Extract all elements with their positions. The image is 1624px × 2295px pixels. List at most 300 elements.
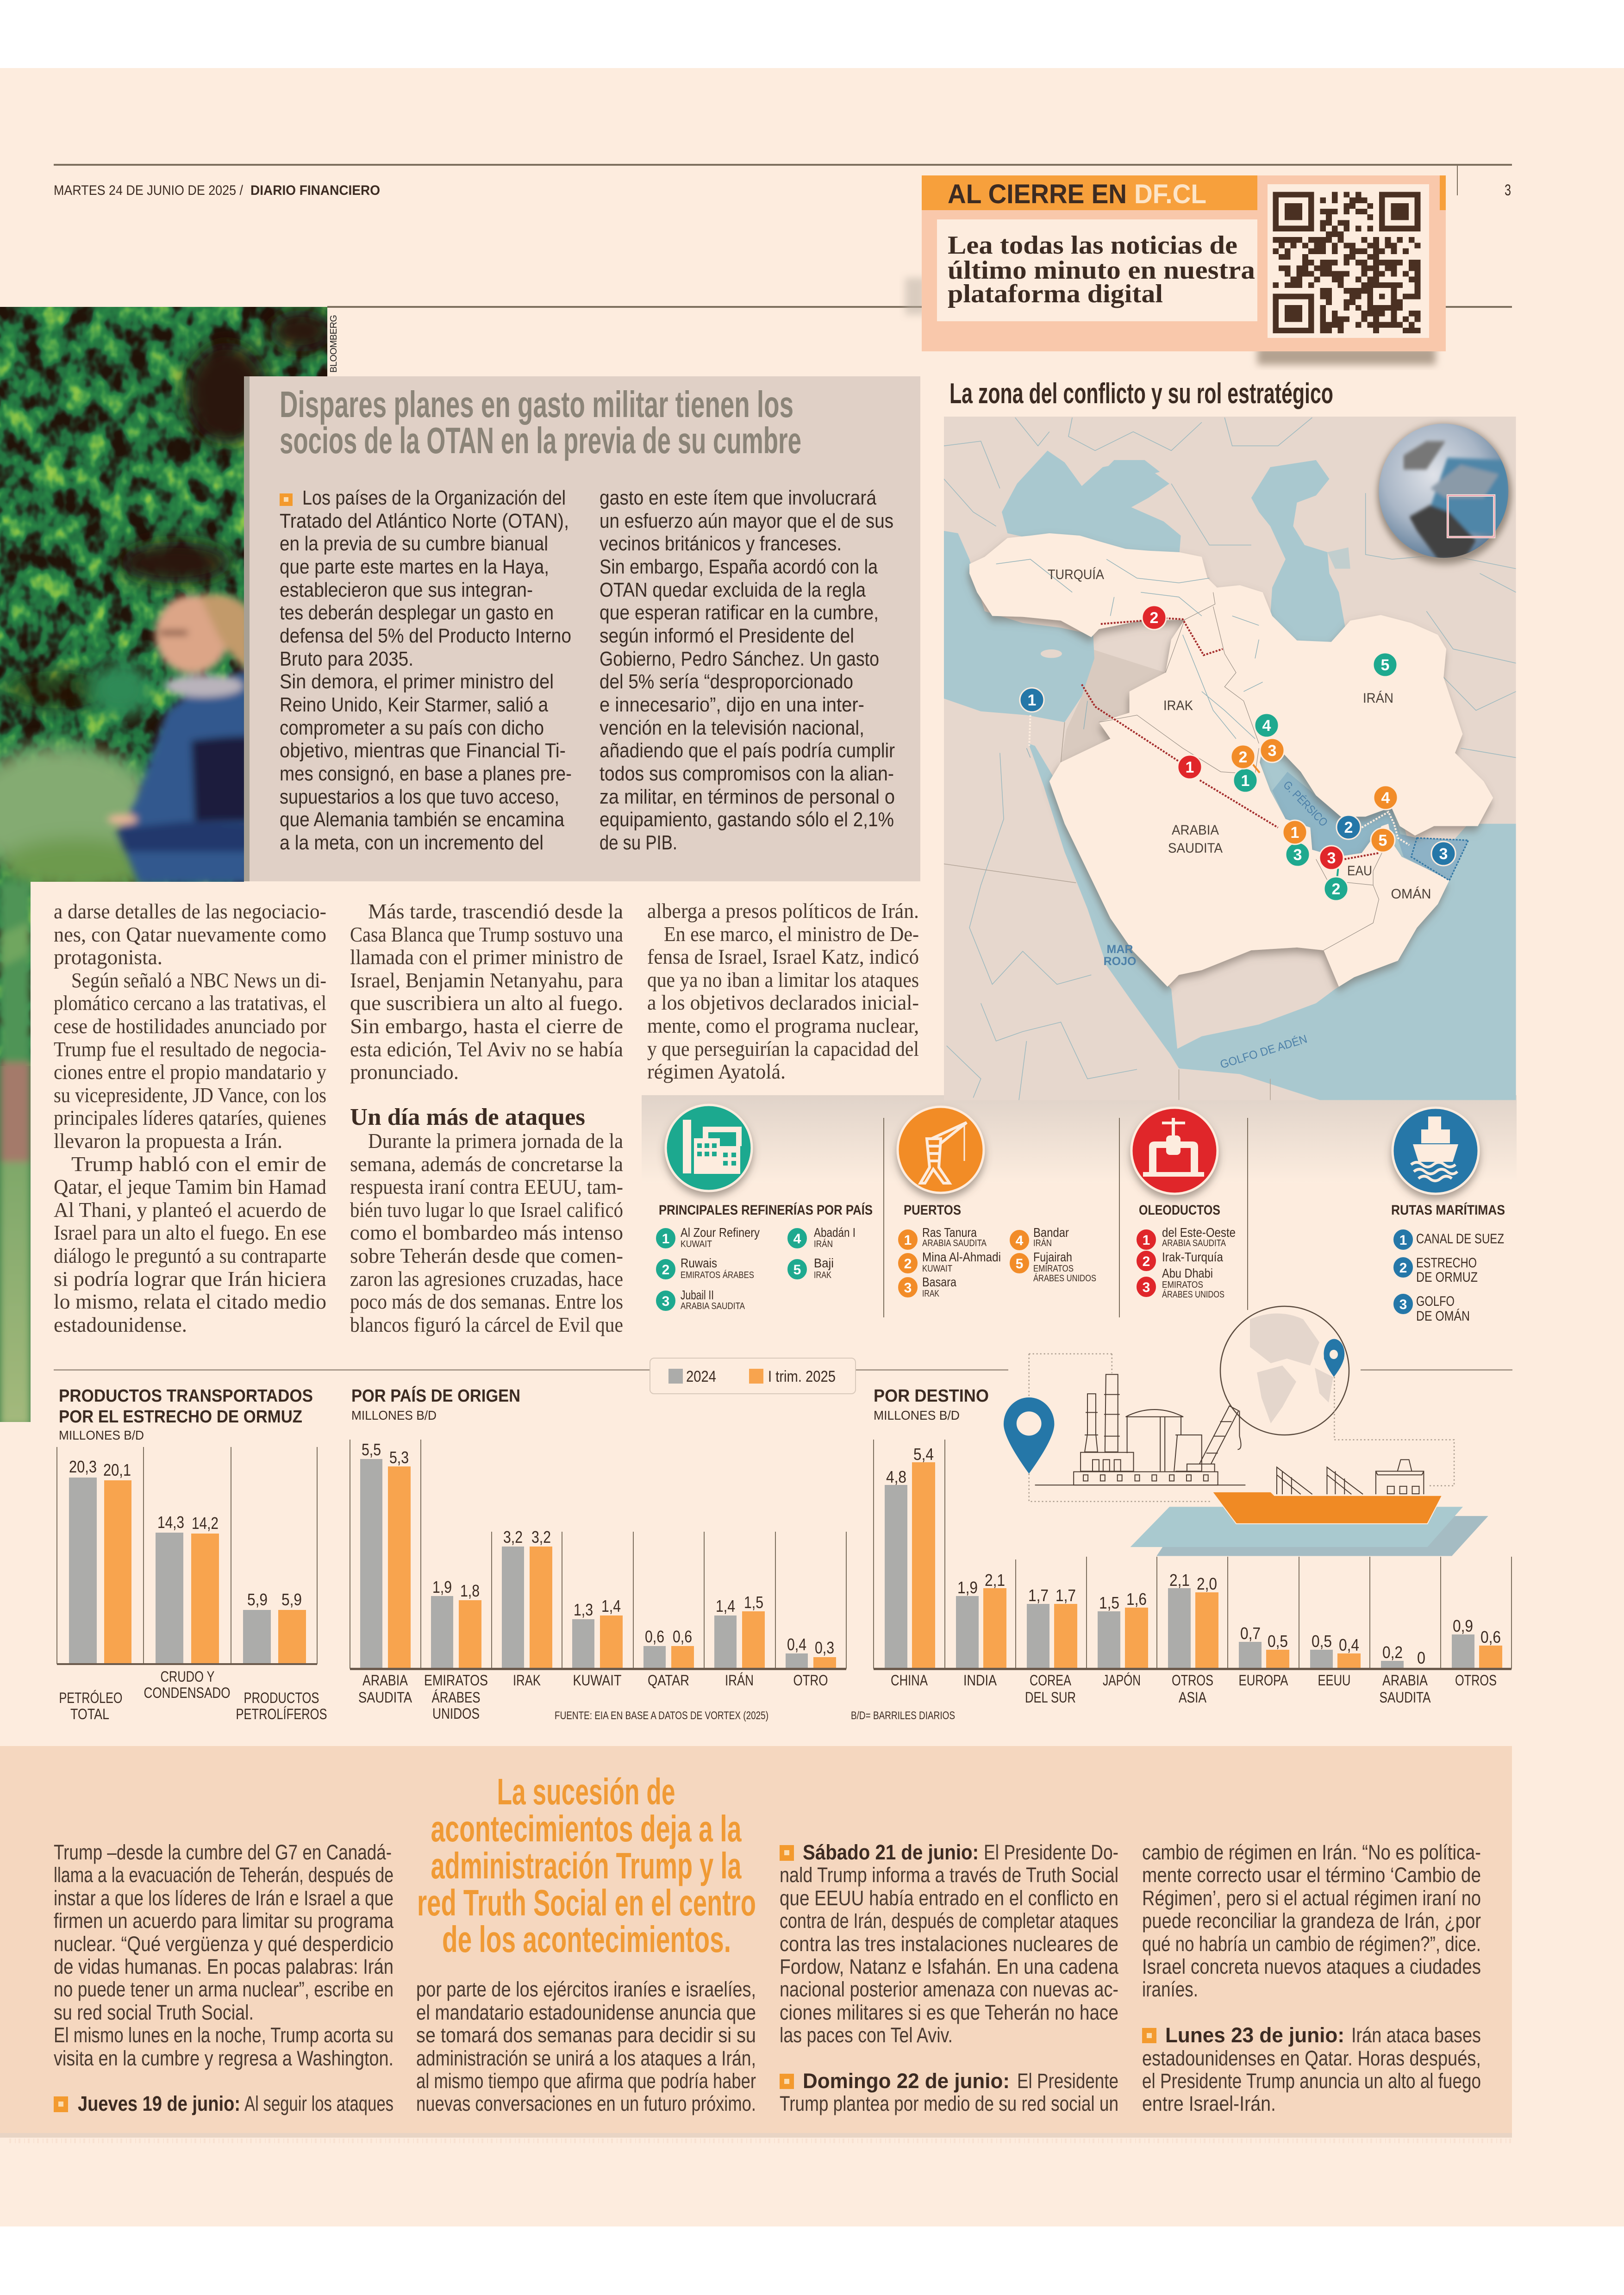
text block: timeline column 4: Régimen’, pero si el actual régimen iraní no <box>1142 1886 1481 1910</box>
map markers: 2 <box>1332 880 1340 898</box>
pull quote <box>417 1771 756 1960</box>
legend: sea routes: RUTAS MARÍTIMAS <box>1391 1202 1505 1218</box>
chart: por país de origen: 3,2 <box>503 1528 523 1547</box>
legend: ports: IRÁN <box>1033 1238 1052 1248</box>
chart: productos transportados: PETRÓLEO <box>59 1690 122 1706</box>
chart: por destino: 0,4 <box>1339 1635 1359 1654</box>
text block: article column 2 <box>350 899 623 1336</box>
map markers: 3 <box>1327 849 1336 867</box>
text block: timeline column 4: Irán ataca bases <box>1351 2023 1481 2047</box>
legend: sea routes: CANAL DE SUEZ <box>1416 1231 1504 1247</box>
chart: por destino: CHINA <box>891 1672 928 1689</box>
text block: article column 2: como el bombardeo más intenso <box>350 1221 623 1244</box>
text block: timeline column 1: nuclear. “Qué vergüenza y qué desperdicio <box>54 1932 394 1956</box>
text block: timeline column 4: puede reconciliar la grandeza de Irán, ¿por <box>1142 1909 1481 1933</box>
text block: timeline column 1: Trump –desde la cumbre del G7 en Canadá- <box>54 1840 392 1864</box>
text block: article column 1: Trump fue el resultado de negocia- <box>54 1037 326 1061</box>
icon: crane <box>898 1107 984 1193</box>
text block: OTAN column 1: que parte este martes en la Haya, <box>280 555 549 578</box>
text block: timeline column 4: el Presidente Trump anuncia un alto al fuego <box>1142 2069 1481 2093</box>
legend: sea routes: 2 <box>1399 1260 1407 1276</box>
text block: article column 1: Al Thani, y planteó el acuerdo de <box>54 1198 326 1222</box>
text block: article column 3: fensa de Israel, Israel Katz, indicó <box>647 945 919 968</box>
text block: timeline column 1: de vidas humanas. En pocas palabras: Irán <box>54 1955 394 1978</box>
map pin large <box>1004 1397 1054 1474</box>
legend: refineries: 4 <box>793 1231 801 1247</box>
chart: por país de origen: 0,4 <box>787 1635 806 1654</box>
map labels: EAU <box>1347 863 1372 879</box>
water <box>1156 1516 1488 1556</box>
heading: OTAN: socios de la OTAN en la previa de su cumbre <box>280 420 801 461</box>
legend: ports: Bandar <box>1033 1225 1069 1240</box>
text block: article column 1: lo mismo, relata el citado medio <box>54 1290 326 1313</box>
legend: ports: KUWAIT <box>922 1264 952 1274</box>
legend: pipelines: 2 <box>1143 1254 1150 1269</box>
text block: article column 1 <box>54 899 326 1336</box>
text block: article column 2: Casa Blanca que Trump sostuvo una <box>350 923 623 946</box>
icon: refinery <box>666 1105 752 1191</box>
chart top rules <box>54 1369 1512 1371</box>
icon: pipeline valve <box>1131 1108 1218 1194</box>
chart title: POR EL ESTRECHO DE ORMUZ <box>59 1407 302 1427</box>
legend: pipelines: ÁRABES UNIDOS <box>1162 1289 1224 1300</box>
chart: por país de origen: 0,6 <box>645 1627 664 1646</box>
legend: ports: Mina Al-Ahmadi <box>922 1250 1001 1264</box>
chart title: POR DESTINO <box>874 1386 989 1406</box>
text block: article column 2: sobre Teherán desde que comen- <box>350 1244 623 1267</box>
legend: refineries <box>656 1202 873 1311</box>
text block: article column 2: zaron las agresiones cruzadas, hace <box>350 1267 623 1291</box>
chart: productos transportados: CRUDO Y <box>160 1668 215 1685</box>
chart: por destino: 4,8 <box>886 1467 906 1486</box>
text block: article column 1: su vicepresidente, JD Vance, con los <box>54 1083 326 1107</box>
text block: OTAN column 1: Bruto para 2035. <box>280 648 413 670</box>
chart: por país de origen: QATAR <box>648 1672 689 1689</box>
date line: DIARIO FINANCIERO <box>250 183 380 198</box>
legend: ports: 5 <box>1016 1256 1023 1272</box>
text block: timeline column 3: Fordow, Natanz e Isfahán. En una cadena <box>780 1955 1119 1978</box>
chart: productos transportados: 20,1 <box>103 1460 131 1479</box>
chart: por país de origen: 5,5 <box>362 1440 381 1459</box>
chart: productos transportados <box>57 1386 327 1722</box>
promo box: al cierre en DF.CL: Lea todas las noticias de <box>948 231 1237 260</box>
text block: article column 3: que ya no iban a limitar los ataques <box>647 968 919 992</box>
text block: timeline column 3: El Presidente Do- <box>984 1840 1118 1864</box>
chart: por país de origen: SAUDITA <box>358 1689 412 1706</box>
text block: timeline column 1: no puede tener un arma nuclear”, escribe en <box>54 1977 394 2001</box>
chart title <box>874 1386 989 1422</box>
text block: OTAN column 1: defensa del 5% del Producto Interno <box>280 624 571 647</box>
legend: refineries: 1 <box>662 1231 669 1247</box>
legend dividers <box>884 1118 1248 1317</box>
chart: productos transportados: PETROLÍFEROS <box>236 1706 327 1722</box>
map markers: 3 <box>1439 845 1448 863</box>
legend: refineries: Ruwais <box>681 1256 717 1270</box>
chart: por destino: OTROS <box>1455 1672 1497 1689</box>
text block: article column 1: protagonista. <box>54 945 162 969</box>
legend: ports: Basara <box>922 1275 956 1289</box>
chart: por destino: ARABIA <box>1382 1672 1428 1689</box>
text block: article column 2: Israel, Benjamin Netanyahu, para <box>350 968 623 992</box>
legend: ports <box>898 1203 1096 1299</box>
chart: por destino: 2,1 <box>985 1571 1005 1590</box>
text block: article column 1: estadounidense. <box>54 1313 187 1336</box>
date line: MARTES 24 DE JUNIO DE 2025 / <box>54 183 244 198</box>
text block: article column 1: Qatar, el jeque Tamim bin Hamad <box>54 1175 326 1198</box>
legend: sea routes <box>1391 1202 1505 1324</box>
text block: timeline column 4: iraníes. <box>1142 1977 1198 2001</box>
map markers: 1 <box>1241 772 1249 790</box>
legend: pipelines: 3 <box>1143 1280 1150 1295</box>
chart: por país de origen: 1,4 <box>716 1597 735 1615</box>
legend: ports: Ras Tanura <box>922 1225 977 1240</box>
text block: article column 1: diálogo le preguntó a su contraparte <box>54 1244 326 1267</box>
text block: timeline column 3: El Presidente <box>1017 2069 1118 2093</box>
chart: por país de origen: ÁRABES <box>431 1689 481 1706</box>
text block: OTAN column 1: Reino Unido, Keir Starmer, salió a <box>280 693 548 716</box>
text block: article column 2: Sin embargo, hasta el cierre de <box>350 1014 623 1038</box>
text block: OTAN column 2: OTAN quedar excluida de la regla <box>600 579 866 601</box>
header rules <box>54 164 1512 308</box>
legend: ports: IRAK <box>922 1289 940 1299</box>
text block: timeline column 2: se tomará dos semanas para decidir si su <box>416 2023 756 2047</box>
text block: OTAN column 1: establecieron que sus integran- <box>280 579 533 601</box>
chart title: MILLONES B/D <box>59 1428 144 1442</box>
text block: timeline column 2: administración se unirá a los ataques a Irán, <box>416 2046 756 2070</box>
text block: article column 2: que suscribiera un alto al fuego. <box>350 991 623 1015</box>
pull quote: La sucesión de <box>497 1771 675 1812</box>
text block: OTAN column 2: vecinos británicos y franceses. <box>600 532 842 555</box>
pull quote: administración Trump y la <box>431 1845 742 1886</box>
legend: refineries: ARABIA SAUDITA <box>681 1301 745 1311</box>
text block: article column 3 <box>647 899 919 1083</box>
map markers: 2 <box>1344 819 1353 836</box>
text block: OTAN column 2: gasto en este ítem que involucrará <box>600 486 876 509</box>
text block: timeline column 3 <box>780 1840 1119 2115</box>
chart title: PRODUCTOS TRANSPORTADOS <box>59 1386 313 1406</box>
legend: refineries: Abadán I <box>814 1225 856 1240</box>
text block: article column 1: a darse detalles de las negociacio- <box>54 899 326 923</box>
chart: por destino: 2,1 <box>1169 1571 1190 1590</box>
map markers: 4 <box>1381 789 1390 807</box>
text block: OTAN column 2 <box>600 486 895 854</box>
text block: timeline column 3: Domingo 22 de junio: <box>803 2069 1010 2093</box>
text block: timeline column 4: mente correcto usar el término ‘Cambio de <box>1142 1863 1481 1887</box>
text block: article column 1: Según señaló a NBC News un di- <box>71 968 326 992</box>
chart: por destino <box>874 1386 1512 1706</box>
text block: OTAN column 1: comprometer a su país con dicho <box>280 717 544 739</box>
text block: timeline column 4: cambio de régimen en Irán. “No es política- <box>1142 1840 1481 1864</box>
text block: article column 3: a los objetivos declarados inicial- <box>647 991 919 1014</box>
text block: OTAN column 2: añadiendo que el país podría cumplir <box>600 739 895 762</box>
legend: refineries: IRÁN <box>814 1239 833 1249</box>
map markers: 3 <box>1268 742 1276 760</box>
text block: OTAN column 2: todos sus compromisos con la alian- <box>600 762 894 785</box>
text block: OTAN column 1: Los países de la Organización del <box>302 486 566 509</box>
text block: timeline column 1: llama a la evacuación de Teherán, después de <box>54 1863 394 1887</box>
globe inset <box>1377 424 1512 564</box>
text block: article column 1: ciones entre el propio mandatario y <box>54 1060 326 1084</box>
text block: timeline column 4 <box>1142 1840 1481 2115</box>
text block: OTAN column 2: del 5% sería “desproporcionado <box>600 670 853 693</box>
text block: article column 2: bién tuvo lugar lo que Israel calificó <box>350 1198 623 1222</box>
heading: OTAN: Dispares planes en gasto militar tienen los <box>280 384 793 425</box>
legend: ports: EMIRATOS <box>1033 1264 1074 1274</box>
legend: refineries: Al Zour Refinery <box>681 1225 760 1240</box>
legend: pipelines <box>1136 1203 1236 1300</box>
text block: article column 1: principales líderes qataríes, quienes <box>54 1106 326 1129</box>
text block: article column 1: plomático cercano a las tratativas, el <box>54 991 326 1015</box>
text block: timeline column 3: Trump plantea por medio de su red social un <box>780 2092 1118 2115</box>
text block: timeline column 4: Lunes 23 de junio: <box>1165 2023 1344 2047</box>
chart: por país de origen: 1,3 <box>574 1600 593 1619</box>
text block: article column 2: esta edición, Tel Aviv no se había <box>350 1037 623 1061</box>
chart title <box>59 1386 313 1442</box>
text block: article column 2: llamada con el primer ministro de <box>350 945 623 969</box>
chart: por destino: 0 <box>1417 1648 1425 1667</box>
text block: OTAN column 1: a la meta, con un incremento del <box>280 831 543 854</box>
promo box: al cierre en DF.CL: DF.CL <box>1134 179 1206 209</box>
map markers: 4 <box>1262 717 1271 735</box>
map labels: IRAK <box>1163 698 1193 713</box>
legend: sea routes: DE ORMUZ <box>1416 1270 1478 1285</box>
illustration: globe, factory and ship <box>1004 1306 1488 1556</box>
text block: timeline column 4: Israel concreta nuevos ataques a ciudades <box>1142 1955 1481 1978</box>
legend: refineries: PRINCIPALES REFINERÍAS POR PAÍS <box>659 1202 873 1218</box>
text block: timeline column 1: visita en la cumbre y regresa a Washington. <box>54 2046 394 2070</box>
text block: OTAN column 2: e innecesario”, dijo en una inter- <box>600 693 864 716</box>
text block: OTAN column 2: de su PIB. <box>600 831 677 854</box>
pull quote: de los acontecimientos. <box>442 1919 731 1960</box>
text block: article column 2: respuesta iraní contra EEUU, tam- <box>350 1175 623 1198</box>
text block: timeline column 3: contra de Irán, después de completar ataques <box>780 1909 1118 1933</box>
text block: timeline column 2: nuevas conversaciones en un futuro próximo. <box>416 2092 756 2115</box>
map labels: ARABIA <box>1172 823 1219 838</box>
chart legend: 2024 <box>686 1368 716 1385</box>
text block: OTAN column 1: mes consignó, en base a planes pre- <box>280 762 572 785</box>
map sea labels: MAR <box>1107 943 1133 956</box>
chart: por destino: 0,5 <box>1268 1632 1288 1651</box>
legend: sea routes: 3 <box>1399 1297 1407 1312</box>
text block: article column 1: llevaron la propuesta a Irán. <box>54 1129 282 1153</box>
text block: article column 3: alberga a presos políticos de Irán. <box>647 899 919 923</box>
panel: timeline band <box>0 1746 1512 2141</box>
chart: por destino: JAPÓN <box>1103 1672 1141 1689</box>
text block: article column 2: pronunciado. <box>350 1060 459 1084</box>
chart: por destino: 0,9 <box>1453 1616 1473 1635</box>
map sea labels <box>1104 778 1330 1071</box>
text block: timeline column 3: nacional posterior amenaza con nuevas ac- <box>780 1977 1118 2001</box>
chart: por país de origen: 1,9 <box>432 1578 452 1597</box>
chart: por destino: 1,6 <box>1126 1590 1147 1609</box>
chart: por país de origen: IRÁN <box>725 1672 754 1689</box>
text block: timeline column 2 <box>416 1977 756 2115</box>
text block: OTAN column 2: Gobierno, Pedro Sánchez. Un gasto <box>600 648 879 670</box>
text block: article column 1: nes, con Qatar nuevamente como <box>54 923 326 946</box>
text block: OTAN column 1: tes deberán desplegar un gasto en <box>280 601 554 624</box>
footnote: barriles diarios: B/D= BARRILES DIARIOS <box>851 1709 955 1722</box>
map markers: 2 <box>1150 609 1158 627</box>
text block: timeline column 1: Jueves 19 de junio: <box>78 2092 240 2115</box>
legend: refineries: IRAK <box>814 1270 832 1280</box>
text block: OTAN column 1: en la previa de su cumbre bianual <box>280 532 548 555</box>
chart: por destino: SAUDITA <box>1380 1689 1431 1706</box>
pull quote: red Truth Social en el centro <box>417 1882 756 1923</box>
chart title: MILLONES B/D <box>874 1408 960 1422</box>
legend: refineries: EMIRATOS ÁRABES <box>681 1270 754 1280</box>
chart: por destino: 2,0 <box>1197 1574 1217 1593</box>
promo box: al cierre en DF.CL: AL CIERRE EN <box>948 179 1127 209</box>
text block: OTAN column 1: Tratado del Atlántico Norte (OTAN), <box>280 510 569 532</box>
text block: article column 2: Más tarde, trascendió desde la <box>368 899 623 923</box>
text block: OTAN column 1: que Alemania también se encamina <box>280 808 564 831</box>
text block: timeline column 3: ciones militares si es que Teherán no hace <box>780 2001 1118 2024</box>
map sea labels: GOLFO DE ADÉN <box>1218 1032 1309 1071</box>
text block: timeline column 3: nald Trump informa a través de Truth Social <box>780 1863 1118 1887</box>
legend: pipelines: EMIRATOS <box>1162 1280 1203 1290</box>
text block: article column 1: cese de hostilidades anunciado por <box>54 1014 326 1038</box>
chart: por destino: 5,4 <box>913 1445 934 1464</box>
text block: timeline column 3: que EEUU había entrado en el conflicto en <box>780 1886 1118 1910</box>
ship hull <box>1212 1492 1442 1524</box>
text block: OTAN column 2: según informó el Presidente del <box>600 624 854 647</box>
text block: OTAN column 1: supuestarios a los que tuvo acceso, <box>280 786 559 808</box>
legend: ports: 4 <box>1016 1233 1024 1248</box>
legend: refineries: 2 <box>662 1262 669 1278</box>
chart: por destino: 0,7 <box>1240 1624 1261 1643</box>
legend: refineries: Baji <box>814 1256 834 1270</box>
map labels: IRÁN <box>1363 691 1393 706</box>
map markers: 1 <box>1291 824 1299 842</box>
map labels: TURQUÍA <box>1048 567 1104 582</box>
text block: timeline column 3: las paces con Tel Aviv. <box>780 2023 953 2047</box>
chart: por destino: EEUU <box>1318 1672 1351 1689</box>
text block: article column 1: Israel para un alto el fuego. En ese <box>54 1221 326 1244</box>
legend: pipelines: OLEODUCTOS <box>1139 1203 1220 1218</box>
chart: productos transportados: 5,9 <box>281 1590 302 1609</box>
text block: OTAN column 2: Sin embargo, España acordó con la <box>600 555 878 578</box>
chart legend <box>650 1358 856 1394</box>
map markers: 5 <box>1379 832 1387 849</box>
promo box: al cierre en DF.CL: último minuto en nuestra <box>948 256 1255 285</box>
legend: ports: 1 <box>904 1233 912 1248</box>
text block: OTAN column 1: objetivo, mientras que Financial Ti- <box>280 739 566 762</box>
chart: productos transportados: TOTAL <box>70 1706 109 1722</box>
panel: OTAN article <box>244 376 920 881</box>
map labels: OMÁN <box>1391 886 1431 902</box>
chart: por país de origen: 1,4 <box>601 1597 621 1615</box>
chart: por país de origen <box>350 1385 846 1722</box>
legend: refineries: Jubail II <box>681 1288 714 1302</box>
text block: OTAN column 1: Sin demora, el primer ministro del <box>280 670 554 693</box>
date line <box>54 183 380 198</box>
marker <box>280 493 293 506</box>
chart: por país de origen: UNIDOS <box>432 1705 480 1722</box>
chart legend: I trim. 2025 <box>768 1368 836 1385</box>
text block: article column 2: poco más de dos semanas. Entre los <box>350 1290 623 1313</box>
text block: article column 2: Durante la primera jornada de la <box>368 1129 623 1153</box>
map: Middle East <box>944 417 1516 1100</box>
icon: ship <box>1393 1108 1479 1194</box>
text block: timeline column 2: por parte de los ejércitos iraníes e israelíes, <box>416 1977 756 2001</box>
chart: por destino: OTROS <box>1172 1672 1213 1689</box>
text block: timeline column 2: al mismo tiempo que afirma que podría haber <box>416 2069 756 2093</box>
promo box: al cierre en DF.CL <box>905 175 1446 365</box>
text block: article column 2: blancos figuró la cárcel de Evil que <box>350 1313 623 1336</box>
heading: map: La zona del conflicto y su rol estratégico <box>949 378 1333 410</box>
text block: timeline column 1: El mismo lunes en la noche, Trump acorta su <box>54 2023 394 2047</box>
text block: OTAN column 2: equipamiento, gastando sólo el 2,1% <box>600 808 894 831</box>
chart: productos transportados: 5,9 <box>247 1590 268 1609</box>
legend: pipelines: ARABIA SAUDITA <box>1162 1238 1226 1248</box>
chart: productos transportados: CONDENSADO <box>144 1684 231 1701</box>
text block: OTAN column 2: vención en la televisión nacional, <box>600 717 864 739</box>
text block: article column 3: y que perseguirían la capacidad del <box>647 1037 919 1060</box>
text block: article column 3: En ese marco, el ministro de De- <box>664 922 919 946</box>
chart title <box>351 1385 520 1422</box>
legend band background <box>642 1095 1517 1183</box>
text block: timeline column 1: firmen un acuerdo para limitar su programa <box>54 1909 394 1933</box>
text block: OTAN column 1 <box>280 486 572 854</box>
legend: ports: ARABIA SAUDITA <box>922 1238 987 1248</box>
text block: timeline column 3: Sábado 21 de junio: <box>803 1840 979 1864</box>
legend: pipelines: 1 <box>1143 1233 1150 1248</box>
chart: por destino: 1,7 <box>1056 1586 1076 1605</box>
chart: por país de origen: 0,3 <box>815 1638 834 1657</box>
text block: timeline column 4: entre Israel-Irán. <box>1142 2092 1276 2115</box>
chart: por destino: 0,5 <box>1312 1632 1332 1651</box>
chart: por destino: EUROPA <box>1239 1672 1288 1689</box>
heading: OTAN <box>280 384 801 461</box>
map markers <box>1020 605 1455 901</box>
chart: por destino: 1,7 <box>1028 1586 1049 1605</box>
legend: pipelines: del Este-Oeste <box>1162 1225 1236 1240</box>
text block: timeline column 4: estadounidenses en Qatar. Horas después, <box>1142 2046 1481 2070</box>
chart: productos transportados: 14,2 <box>192 1514 219 1533</box>
text block: timeline column 1: instar a que los líderes de Irán e Israel a que <box>54 1886 394 1910</box>
source note: FUENTE: EIA EN BASE A DATOS DE VORTEX (2025) <box>555 1709 768 1722</box>
map markers: 1 <box>1028 692 1036 709</box>
QR code <box>1273 192 1420 333</box>
small map pin <box>1324 1339 1344 1377</box>
photo: blurred man in front of foliage <box>0 307 333 1426</box>
text block: article column 3: mente, como el programa nuclear, <box>647 1014 919 1037</box>
chart: productos transportados: PRODUCTOS <box>244 1690 319 1706</box>
chart: por destino: COREA <box>1030 1672 1072 1689</box>
legend: refineries: 3 <box>662 1294 669 1309</box>
text block: timeline column 2: el mandatario estadounidense anuncia que <box>416 2001 756 2024</box>
chart: por país de origen: IRAK <box>513 1672 541 1689</box>
chart: por destino: DEL SUR <box>1025 1689 1076 1706</box>
chart: por país de origen: 3,2 <box>531 1528 551 1547</box>
legend: ports: Fujairah <box>1033 1250 1072 1264</box>
legend: refineries: 5 <box>793 1262 801 1278</box>
text block: OTAN column 2: za militar, en términos de personal o <box>600 786 895 808</box>
pull quote: acontecimientos deja a la <box>431 1808 742 1849</box>
legend: ports: PUERTOS <box>904 1203 961 1218</box>
chart: por destino: ASIA <box>1179 1689 1207 1706</box>
legend: sea routes: ESTRECHO <box>1416 1255 1477 1271</box>
chart: por país de origen: ARABIA <box>362 1672 408 1689</box>
legend: pipelines: Abu Dhabi <box>1162 1266 1213 1280</box>
legend: sea routes: GOLFO <box>1416 1294 1455 1309</box>
chart: por destino: 0,6 <box>1480 1628 1501 1646</box>
page number: 3 <box>1505 181 1511 199</box>
map markers: 2 <box>1239 748 1247 766</box>
map markers: 3 <box>1293 846 1302 864</box>
chart: por destino: INDIA <box>963 1672 997 1689</box>
legend: refineries: KUWAIT <box>681 1239 712 1249</box>
